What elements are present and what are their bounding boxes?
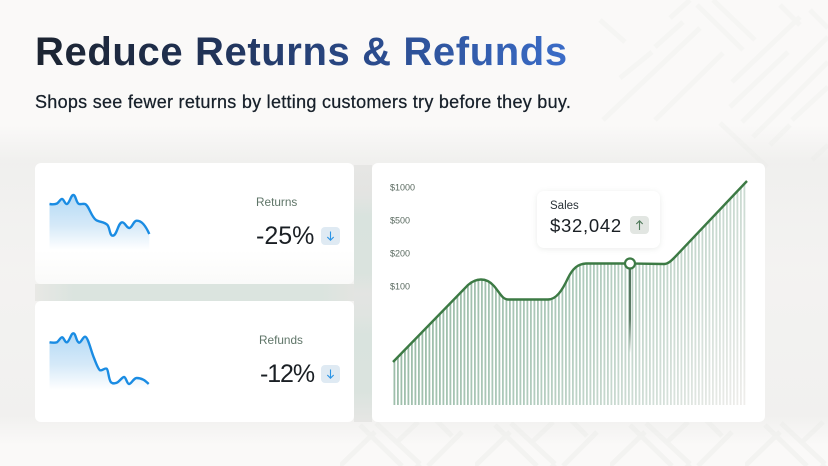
icon: up arrow: [630, 216, 649, 234]
y axis labels: $500: [390, 216, 410, 226]
sales line: [393, 181, 747, 362]
icon: down arrow: [321, 365, 340, 383]
y axis labels: $1000: [390, 182, 415, 192]
sparkline: refunds: [49, 332, 150, 386]
panel: sales chart: [372, 163, 765, 422]
panel: returns: [35, 163, 354, 284]
marker: [625, 258, 635, 268]
area line chart: [390, 180, 748, 405]
label: refunds: Refunds: [259, 333, 303, 347]
tooltip label: Sales: [550, 200, 579, 212]
tooltip: sales: [537, 191, 660, 248]
sparkline: returns: [49, 194, 150, 246]
bars: [393, 181, 747, 405]
title: Reduce Returns & Refunds: [35, 30, 568, 74]
y axis labels: $100: [390, 282, 410, 292]
y axis labels: [390, 182, 415, 292]
value: -25%: -25%: [256, 222, 314, 250]
panel: refunds: [35, 301, 354, 422]
y axis labels: $200: [390, 248, 410, 258]
marker drop line: [629, 268, 631, 353]
value: -12%: -12%: [260, 360, 314, 388]
subtitle: Shops see fewer returns by letting customers try before they buy.: [35, 92, 571, 112]
icon: down arrow: [321, 227, 340, 245]
tooltip value: $32,042: [550, 215, 622, 236]
label: returns: Returns: [256, 195, 297, 209]
